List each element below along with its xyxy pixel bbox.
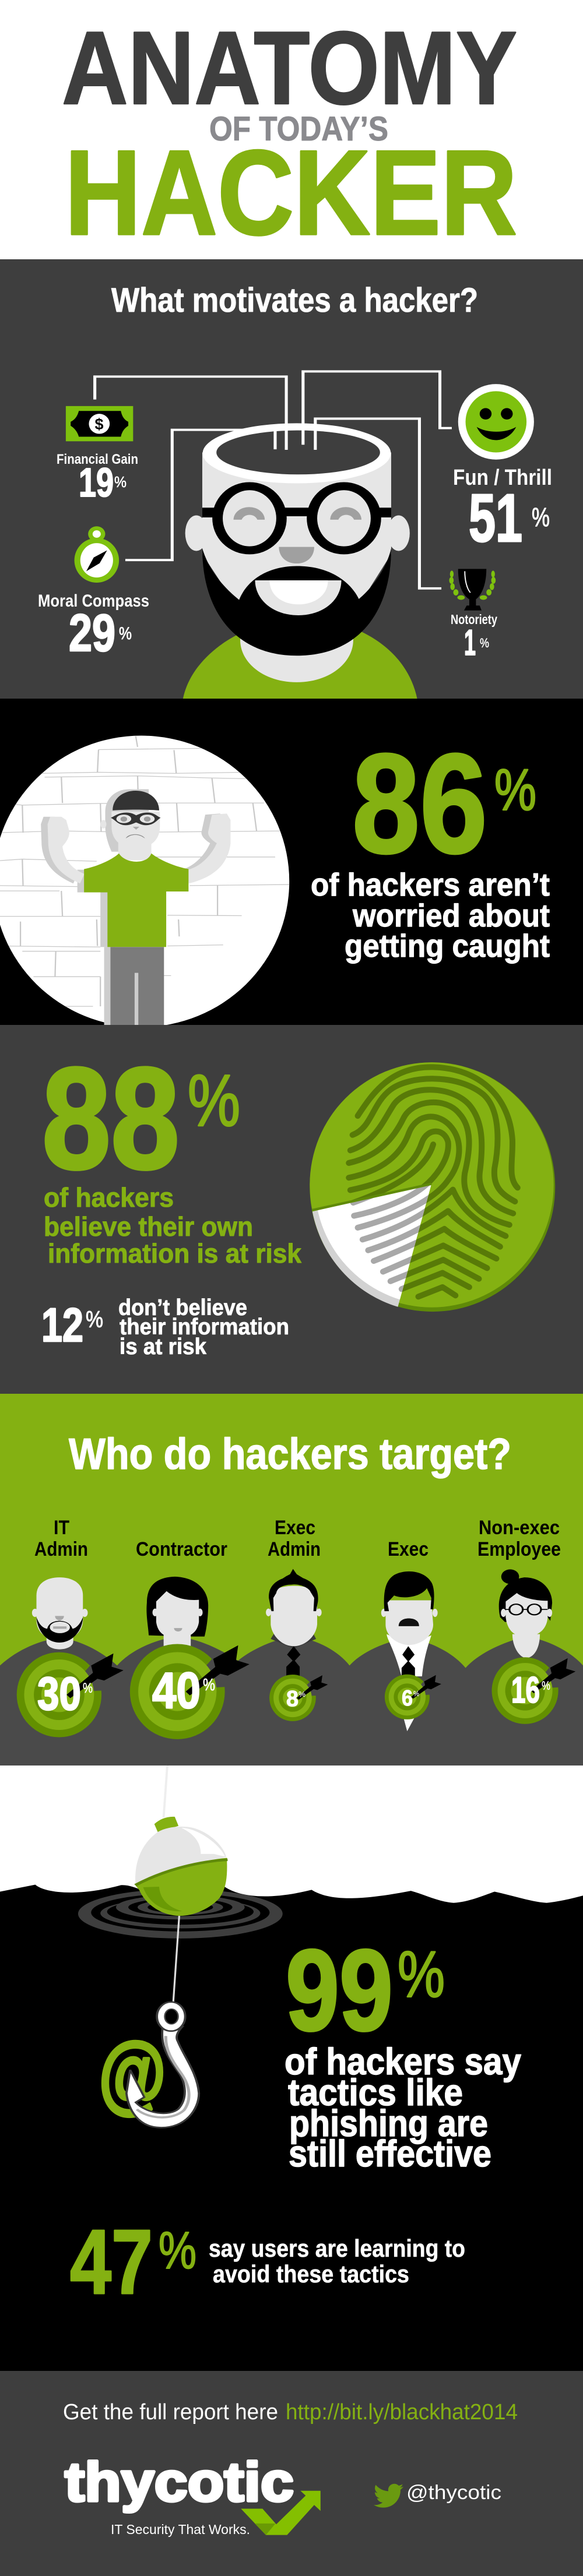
text: of hackers say tactics like phishing are still effective: phishing are <box>289 2102 488 2144</box>
icon: compass <box>75 526 119 583</box>
title: hacker: HACKER <box>65 125 517 260</box>
labels: job roles: Admin <box>268 1538 321 1560</box>
icon: twitter bird <box>374 2484 403 2508</box>
logo: thycotic wordmark: thycotic <box>65 2451 294 2513</box>
chart: target 40 percent with dart <box>130 1644 250 1739</box>
icon: dollar sign: $ <box>94 415 104 433</box>
stat: 12 percent: 12 <box>41 1299 83 1352</box>
label: fun thrill 51 percent: Fun / Thrill <box>453 466 552 490</box>
illustration: five target people <box>0 1569 583 1766</box>
person: non-exec employee <box>499 1569 552 1658</box>
label: moral compass 29 percent: 29 <box>69 604 115 662</box>
text: of hackers aren't worried about getting caught: getting caught <box>345 928 550 964</box>
label: financial gain 19 percent: Financial Gain <box>57 452 138 467</box>
chart: target 8 percent with dart <box>269 1675 328 1721</box>
illustration: water ripples <box>78 1889 283 1939</box>
text: get the full report: Get the full report here <box>63 2400 278 2425</box>
stats: target percentages: % <box>298 1690 305 1698</box>
text: don't believe their information is at risk <box>118 1295 289 1359</box>
illustration: fish hook <box>127 2002 199 2127</box>
text: of hackers say tactics like phishing are still effective: tactics like <box>288 2071 463 2113</box>
panel: title header <box>0 0 583 260</box>
stat: 12 percent: % <box>86 1307 103 1333</box>
label: financial gain 19 percent <box>57 452 138 505</box>
stats: target percentages: % <box>203 1676 215 1694</box>
label: financial gain 19 percent: 19 <box>79 460 114 505</box>
title: anatomy: ANATOMY <box>62 10 517 126</box>
labels: job roles: Admin <box>34 1538 88 1560</box>
text: don't believe their information is at risk: don’t believe <box>118 1295 247 1320</box>
chart: target 16 percent with dart <box>491 1657 575 1724</box>
text: of hackers believe their own information is at risk: information is at risk <box>48 1238 301 1268</box>
panel: phishing <box>0 1766 583 2371</box>
label: notoriety 1 percent: 1 <box>464 623 476 663</box>
illustration: dark water with wavy surface <box>0 1884 583 2371</box>
text: of hackers say tactics like phishing are still effective: of hackers say <box>285 2041 521 2082</box>
chart: target 6 percent with dart <box>385 1675 441 1719</box>
labels: job roles <box>34 1517 561 1560</box>
label: fun thrill 51 percent <box>453 466 552 556</box>
stat: 86 percent: % <box>494 757 536 823</box>
label: notoriety 1 percent <box>451 612 497 663</box>
labels: job roles: Employee <box>477 1538 561 1560</box>
text: don't believe their information is at risk: is at risk <box>120 1334 206 1359</box>
text: of hackers aren't worried about getting caught: of hackers aren’t <box>311 866 550 903</box>
stats: target percentages <box>37 1662 550 1719</box>
panel: worried about getting caught <box>0 699 583 1027</box>
labels: job roles: Exec <box>275 1517 315 1539</box>
label: financial gain 19 percent: % <box>114 473 127 491</box>
stats: target percentages: % <box>83 1680 93 1696</box>
text: of hackers aren't worried about getting caught: worried about <box>352 897 550 933</box>
labels: job roles: IT <box>54 1517 69 1539</box>
label: fun thrill 51 percent: 51 <box>469 480 522 556</box>
label: moral compass 29 percent <box>38 591 149 662</box>
icon: smiley face <box>458 384 534 460</box>
stats: target percentages: 8 <box>286 1687 298 1711</box>
heading: who do hackers target: Who do hackers target? <box>69 1429 511 1478</box>
label: moral compass 29 percent: Moral Compass <box>38 591 149 611</box>
text: of hackers believe their own information is at risk: believe their own <box>44 1211 253 1242</box>
label: fun thrill 51 percent: % <box>532 502 550 532</box>
stats: target percentages: 6 <box>402 1686 413 1711</box>
person: it admin <box>32 1577 88 1650</box>
text: tagline: IT Security That Works. <box>111 2522 250 2537</box>
panel: footer <box>0 2371 583 2576</box>
label: moral compass 29 percent: % <box>119 624 132 643</box>
icon: trophy with laurels <box>449 569 496 611</box>
text: of hackers believe their own information is at risk <box>44 1182 301 1268</box>
stats: target percentages: 40 <box>152 1662 201 1719</box>
label: notoriety 1 percent: Notoriety <box>451 612 497 627</box>
stats: target percentages: % <box>413 1689 419 1698</box>
label: notoriety 1 percent: % <box>480 636 489 650</box>
stat: 47 percent: 47 <box>70 2211 153 2313</box>
person: exec <box>381 1571 438 1731</box>
heading: what motivates a hacker: What motivates a hacker? <box>111 281 478 319</box>
stat: 86 percent: 86 <box>352 725 487 883</box>
text: say users are learning to avoid these tactics <box>209 2235 465 2288</box>
illustration: bearded hacker with open head <box>95 371 452 699</box>
text: don't believe their information is at risk: their information <box>120 1315 289 1340</box>
text: report url: http://bit.ly/blackhat2014 <box>286 2400 518 2425</box>
chart: fingerprint pie 88 and 12 percent <box>297 1062 557 1316</box>
text: say users are learning to avoid these tactics: avoid these tactics <box>213 2260 409 2288</box>
person: exec admin <box>266 1569 322 1676</box>
panel: information at risk <box>0 1025 583 1394</box>
text: of hackers say tactics like phishing are still effective <box>285 2041 521 2175</box>
labels: job roles: Exec <box>388 1538 429 1560</box>
stat: 99 percent: % <box>398 1938 445 2011</box>
stat: 88 percent: 88 <box>42 1037 180 1199</box>
text: of hackers believe their own information is at risk: of hackers <box>44 1182 174 1213</box>
text: of hackers aren't worried about getting caught <box>311 866 550 964</box>
illustration: spotlight on hacker against brick wall <box>0 736 289 1027</box>
stats: target percentages: 16 <box>511 1670 540 1711</box>
panel: what motivates a hacker <box>0 259 583 699</box>
chart: target 30 percent with dart <box>17 1652 124 1737</box>
text: twitter handle: @thycotic <box>406 2482 501 2504</box>
panel: who do hackers target <box>0 1394 583 1766</box>
text: say users are learning to avoid these tactics: say users are learning to <box>209 2235 465 2262</box>
stats: target percentages: % <box>542 1679 550 1693</box>
labels: job roles: Non-exec <box>479 1517 560 1539</box>
illustration: fishing bobber and line <box>135 1766 227 2007</box>
stat: 99 percent: 99 <box>286 1926 393 2055</box>
labels: job roles: Contractor <box>136 1538 227 1560</box>
person: contractor <box>146 1577 208 1647</box>
icon: money bill <box>66 406 133 441</box>
stat: 47 percent: % <box>159 2222 196 2280</box>
stats: target percentages: 30 <box>37 1668 81 1719</box>
logo: green check arrow <box>241 2491 321 2535</box>
title: of today's: OF TODAY’S <box>209 110 388 148</box>
icon: green at sign: @ <box>99 2024 166 2122</box>
text: of hackers say tactics like phishing are still effective: still effective <box>289 2133 491 2175</box>
stat: 88 percent: % <box>188 1060 240 1141</box>
